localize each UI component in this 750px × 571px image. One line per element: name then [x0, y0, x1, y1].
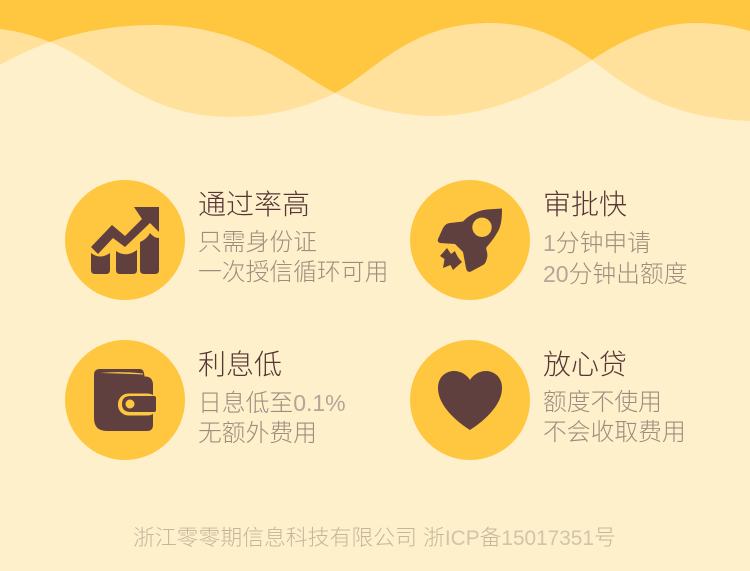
feature: fast approval [410, 180, 688, 300]
icon: rocket [410, 180, 530, 300]
description: 额度不使用 [543, 389, 662, 416]
feature: low interest [65, 340, 346, 460]
description: 一次授信循环可用 [198, 259, 388, 286]
description [543, 389, 686, 446]
icon: heart [410, 340, 530, 460]
heading: 放心贷 [543, 349, 627, 380]
icon: wallet [65, 340, 185, 460]
description [543, 230, 688, 288]
description: 无额外费用 [198, 420, 317, 447]
description: 只需身份证 [198, 229, 317, 256]
description: 20分钟出额度 [543, 261, 688, 288]
description [198, 390, 346, 447]
feature: worry-free loan [410, 340, 686, 460]
footer company and licence: 浙江零零期信息科技有限公司 浙ICP备15017351号 [133, 525, 616, 550]
feature: high approval rate [65, 180, 388, 300]
wave overlap [0, 42, 750, 130]
description [198, 229, 388, 286]
description: 1分钟申请 [543, 230, 651, 257]
description: 日息低至0.1% [198, 390, 346, 417]
icon: rising chart [65, 180, 185, 300]
heading: 通过率高 [198, 189, 310, 220]
description: 不会收取费用 [543, 419, 686, 446]
heading: 审批快 [543, 189, 627, 220]
wave two [0, 23, 750, 130]
heading: 利息低 [198, 349, 282, 380]
wave one [0, 23, 750, 130]
header waves [0, 0, 750, 121]
